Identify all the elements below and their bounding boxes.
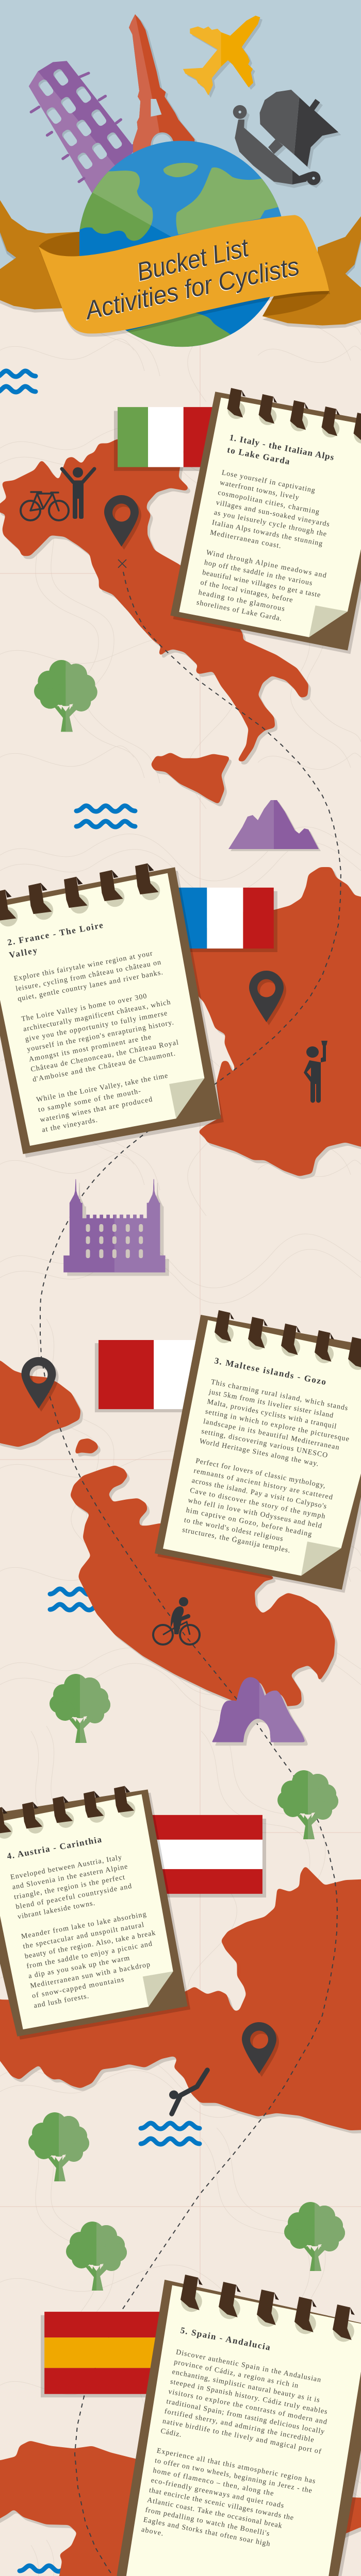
text: Italy	[196, 432, 350, 630]
notebook: Austria	[0, 1786, 190, 2040]
text: Austria: a dip as you soak up the warm	[28, 1954, 130, 1980]
text: Malta: just 5km from its livelier sister island	[208, 1388, 334, 1420]
text: Italy: Mediterranean coast.	[209, 529, 282, 550]
map: Malta	[70, 1465, 335, 1706]
text: Austria: blend of peaceful countryside and	[15, 1883, 133, 1911]
route start marker	[118, 560, 126, 568]
map: Comino	[75, 1438, 99, 1455]
text: Malta: remnants of ancient history are scattered	[193, 1467, 333, 1501]
text: Malta: him captive on Gozo, before heading	[185, 1506, 313, 1538]
title text: Activities for Cyclists	[81, 251, 302, 325]
sky	[0, 0, 361, 290]
text: Austria	[6, 1828, 165, 2010]
text: France: give you the opportunity to fully immerse	[24, 1010, 168, 1043]
flag: Spain	[41, 2312, 164, 2397]
text: Italy: hop off the saddle in the various	[204, 559, 313, 587]
text: France: d'Amboise and the Château de Chaumont.	[32, 1050, 176, 1084]
text: Italy: heading to the glamorous	[198, 589, 285, 613]
icon: tree 4	[28, 2112, 89, 2181]
notebook: Italy	[170, 388, 361, 654]
text: Spain: to offer on two wheels, beginning in Jerez - the	[154, 2457, 313, 2495]
title text: Bucket List	[134, 233, 252, 287]
text: Malta: landscape in its beautiful Mediterranean	[203, 1418, 340, 1452]
text: France: Valley	[8, 945, 38, 960]
text: France: watering wines that are produced	[39, 1096, 153, 1124]
flag: Austria	[147, 1815, 266, 1897]
icon: tree 1	[34, 660, 97, 732]
back ribbon tails	[0, 200, 361, 329]
text: Spain: fortified sherry, and admiring the incredible	[164, 2408, 315, 2444]
icon: aeroplane	[183, 15, 262, 98]
text: Italy: 1. Italy - the Italian Alps	[228, 432, 335, 462]
text: Austria: beauty of the region. Also, take a break	[24, 1929, 156, 1960]
text: Austria: Mediterranean sun with a backdrop	[29, 1961, 151, 1990]
icon: cyclist and person with arms raised	[21, 467, 94, 520]
map: Spain	[0, 2441, 361, 2576]
text: Italy: cosmopolitan cities, charming	[217, 489, 320, 516]
text: France: at the vineyards.	[41, 1116, 98, 1134]
text: France: The Loire Valley is home to over 300	[21, 992, 147, 1023]
text: Austria: Meander from lake to lake absorbing	[21, 1910, 147, 1941]
text: Spain: native birdlife to the lively and magical port of	[162, 2417, 322, 2456]
icon: person with wine glass	[304, 1041, 327, 1103]
icon: map pin 1	[104, 495, 141, 550]
text: Spain: enchanting, simplistic natural beauty as it is	[171, 2368, 320, 2404]
text: Austria: 4. Austria - Carinthia	[6, 1834, 103, 1861]
text: Spain: home of flamenco – then, along the	[152, 2467, 274, 2498]
text: Austria: Enveloped between Austria, Italy	[10, 1854, 122, 1882]
map: France	[184, 867, 361, 1176]
text: France	[6, 910, 190, 1134]
text: Austria: the spectacular and unspoilt natural	[22, 1921, 144, 1951]
text: France: 2. France - The Loire	[7, 920, 104, 947]
icon: tree 3	[277, 1770, 338, 1839]
icon: Eiffel tower	[129, 14, 197, 163]
notebook: Spain	[112, 2275, 361, 2576]
icon: map pin 2	[249, 971, 286, 1025]
text: Spain: that encircle the scenic villages towards the	[149, 2486, 294, 2522]
text: Spain	[141, 2325, 340, 2564]
map: Italy	[0, 439, 308, 761]
text: Spain: traditional Spain; from tasting delicious locally	[166, 2398, 325, 2436]
text: Austria: of snow-capped mountains	[31, 1976, 125, 2000]
text: Austria: from the saddle to enjoy a picnic and	[26, 1940, 153, 1971]
text: France: architecturally magnificent châteaux, which	[23, 998, 171, 1033]
text: Italy: waterfront towns, lively	[219, 479, 300, 502]
text: Spain: from pedalling to watch the Bonelli's	[144, 2506, 270, 2538]
icon: cyclist on Malta	[153, 1597, 200, 1645]
icon: arch rock, Gozo	[212, 1677, 308, 1745]
text: France: While in the Loire Valley, take the time	[36, 1072, 169, 1104]
text: Italy: to Lake Garda	[226, 445, 291, 466]
icon: tree 6	[284, 2202, 345, 2271]
text: Malta: Cave to discover the story of the nymph	[189, 1487, 326, 1520]
text: Malta: This charming rural island, which stands	[210, 1378, 349, 1412]
text: Spain: Discover authentic Spain in the Andalusian	[175, 2348, 321, 2384]
text: Spain: Eagles and Storks that often soar high	[143, 2516, 271, 2548]
text: Malta: 3. Maltese islands - Gozo	[214, 1355, 327, 1387]
text: Italy: villages and sun-soaked vineyards	[215, 499, 330, 529]
header illustration	[0, 0, 361, 359]
text: Austria: triangle, the region is the perfect	[13, 1874, 125, 1901]
icon: sailing ship	[233, 90, 341, 188]
text: France: Château de Chenonceau, the Château Royal	[30, 1039, 179, 1074]
icon: mountain	[228, 800, 321, 851]
text: Malta: setting, discovering various UNESCO	[201, 1428, 328, 1460]
dashed route	[40, 572, 341, 2576]
text: Malta: across the island. Pay a visit to Calypso's	[191, 1477, 327, 1511]
text: Spain: steeped in Spanish history. Cádiz truly enables	[170, 2378, 328, 2416]
title text: Bucket List	[134, 233, 252, 286]
text: Italy: Italian Alps towards the stunning	[211, 519, 323, 548]
icon: map pin 4	[242, 2022, 279, 2077]
icon: globe	[79, 141, 282, 347]
text: France: yourself in the region's enrapturing history.	[26, 1019, 174, 1054]
text: Spain: Cádiz.	[160, 2427, 182, 2439]
icon: diver	[169, 2070, 207, 2114]
text: Malta: Perfect for lovers of classic mythology,	[195, 1457, 326, 1490]
icon: tree 5	[66, 2222, 127, 2291]
text: Italy: Lose yourself in captivating	[221, 469, 316, 495]
text: Malta	[181, 1355, 360, 1562]
flag: Italy	[114, 407, 220, 471]
text: Malta: to the world's oldest religious	[184, 1516, 284, 1543]
text: Malta: who fell in love with Odysseus and held	[187, 1497, 322, 1530]
text: Spain: province of Cádiz, a region as rich in	[173, 2358, 299, 2390]
text: Spain: Experience all that this atmospheric region has	[156, 2447, 316, 2485]
map: Austria	[0, 1866, 361, 2130]
icon: Tower castle, France	[63, 1179, 169, 1276]
flag: Malta	[95, 1340, 200, 1412]
icon: leaning tower of Pisa	[29, 61, 137, 193]
text: France: leisure, cycling from château to château on	[15, 959, 161, 993]
text: Spain: 5. Spain - Andalucia	[179, 2325, 271, 2352]
flag: France	[170, 888, 277, 952]
text: Spain: eco-friendly greenways and quiet roads	[150, 2477, 285, 2510]
text: Austria: and lush forests.	[33, 1992, 89, 2010]
text: Italy: beautiful wine villages to get a taste	[202, 569, 321, 599]
text: France: to sample some of the mouth-	[38, 1088, 142, 1114]
text: Malta: Malta, provides cyclists with a tranquil	[206, 1398, 337, 1431]
title banner	[39, 215, 330, 337]
text: Italy: Wind through Alpine meadows and	[205, 549, 327, 580]
text: Austria: vibrant lakeside towns.	[17, 1900, 95, 1921]
text: Italy: as you leisurely cycle through the	[214, 509, 327, 538]
text: Malta: World Heritage Sites along the way.	[199, 1437, 319, 1468]
title text: Activities for Cyclists	[81, 252, 301, 326]
text: Spain: above.	[141, 2526, 164, 2538]
text: Austria: and Slovenia in the eastern Alpine	[12, 1863, 128, 1891]
text: France: quiet, gentle country lanes and river banks.	[17, 969, 163, 1003]
text: Malta: structures, the Ġgantija temples.	[182, 1525, 291, 1555]
water waves: under land	[0, 371, 200, 2576]
text: Malta: setting in which to explore the picturesque	[205, 1408, 350, 1444]
icon: map pin 3	[22, 1357, 59, 1412]
text: Italy: shorelines of Lake Garda.	[196, 599, 282, 623]
notebook: France	[0, 863, 224, 1158]
text: France: Explore this fairytale wine region at your	[13, 950, 153, 983]
text: France: Amongst its most prominent are the	[28, 1033, 152, 1063]
text: Spain: Atlantic coast. Take the occasional break	[146, 2496, 283, 2530]
text: Spain: visitors to explore the contrasts of modern and	[168, 2388, 327, 2426]
text: Italy: of the local vintages, before	[200, 579, 293, 604]
notebook: Malta	[155, 1310, 361, 1593]
icon: tree 2	[50, 1674, 110, 1743]
map: Sicily	[151, 753, 230, 804]
map: Gozo	[0, 1360, 80, 1447]
